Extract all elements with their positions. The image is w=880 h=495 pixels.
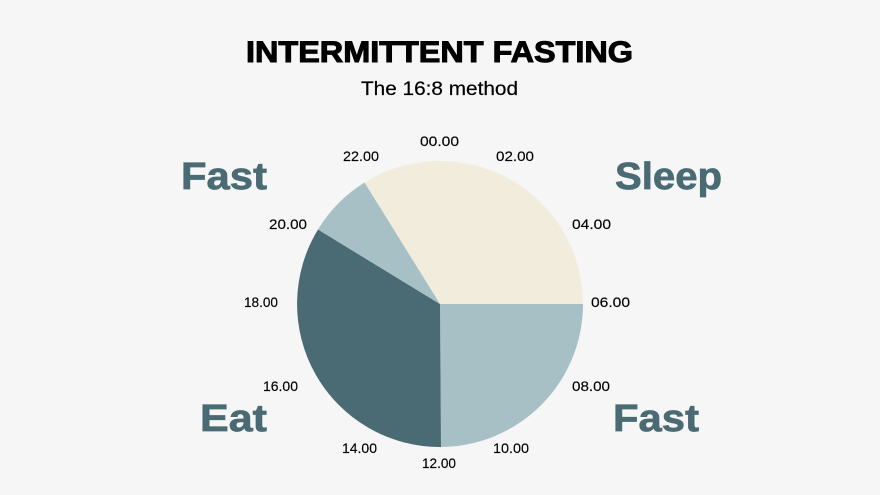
hour labels: 20.00 xyxy=(269,216,307,232)
hour labels: 00.00 xyxy=(420,133,459,149)
hour labels: 12.00 xyxy=(422,455,456,471)
segment: morning fast xyxy=(440,304,583,447)
hour labels: 04.00 xyxy=(572,216,611,232)
segment: sleep xyxy=(364,161,583,304)
pie chart xyxy=(297,161,583,447)
hour labels: 22.00 xyxy=(343,148,379,164)
subtitle: The 16:8 method xyxy=(361,79,518,100)
hour labels: 06.00 xyxy=(591,294,630,310)
label: fast top left: Fast xyxy=(181,156,267,198)
segment: eat xyxy=(297,230,441,447)
hour labels: 08.00 xyxy=(572,378,610,394)
hour labels: 16.00 xyxy=(263,378,298,394)
hour labels xyxy=(244,133,630,471)
hour labels: 18.00 xyxy=(244,294,278,310)
segment: evening fast xyxy=(318,182,440,304)
hour labels: 14.00 xyxy=(342,440,377,456)
label: eat: Eat xyxy=(200,398,267,440)
title: INTERMITTENT FASTING xyxy=(246,36,633,69)
hour labels: 10.00 xyxy=(493,440,529,456)
hour labels: 02.00 xyxy=(496,148,534,164)
label: sleep: Sleep xyxy=(615,156,722,198)
label: fast bottom right: Fast xyxy=(613,398,699,440)
